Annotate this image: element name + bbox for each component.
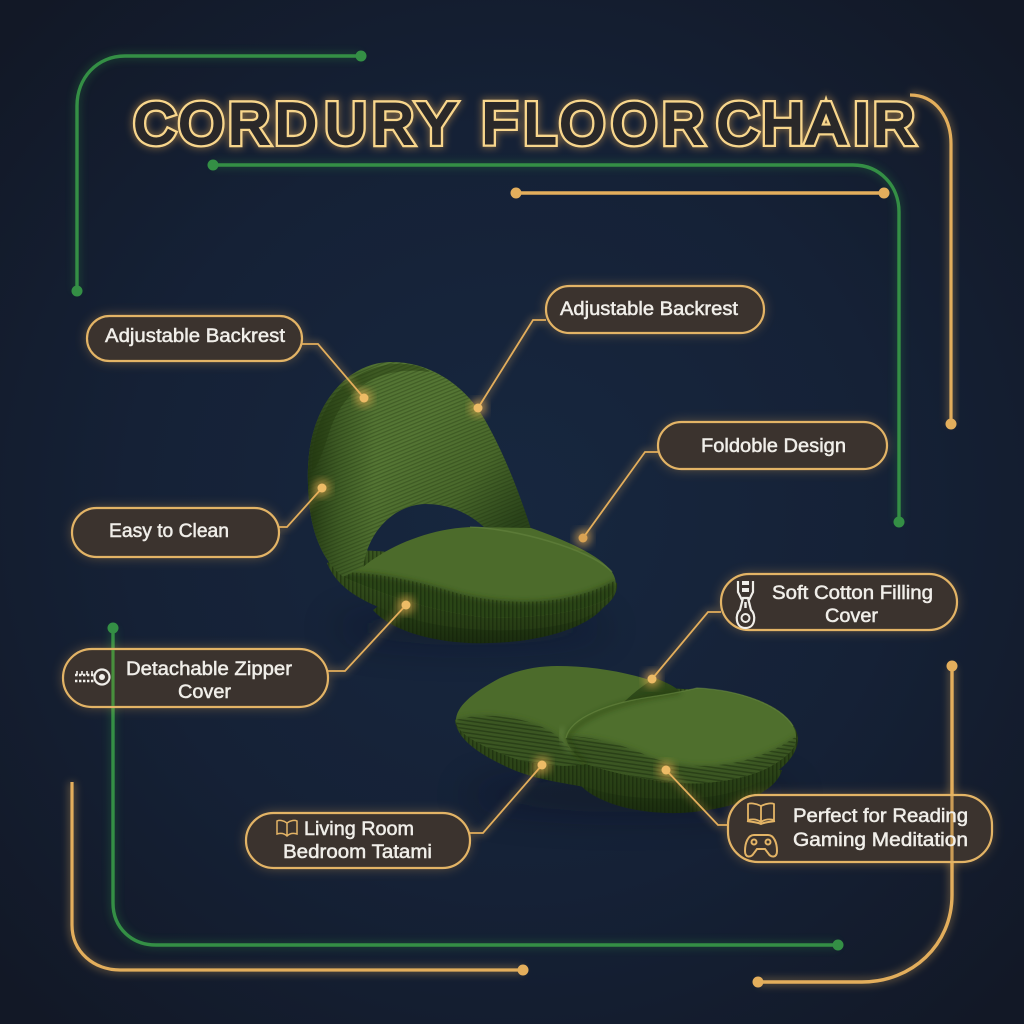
icon: game controller xyxy=(745,835,777,857)
title: CHAIR xyxy=(717,92,915,156)
connector: perfect for reading xyxy=(657,761,728,825)
circuit line: gold bottom right xyxy=(752,660,958,988)
connector: soft cotton xyxy=(643,612,721,688)
connector: easy to clean xyxy=(279,479,331,527)
title: FLOOR xyxy=(482,92,704,156)
title: CHAIR xyxy=(717,92,915,156)
label: soft cotton filling cover xyxy=(721,574,957,630)
chair: upright floor chair xyxy=(308,362,620,646)
label: adjustable backrest right: Adjustable Backrest xyxy=(560,299,739,320)
circuit line: green top left xyxy=(72,50,366,296)
label: soft cotton filling cover: Soft Cotton Filling xyxy=(772,583,933,604)
chair: folded flat cushion xyxy=(450,666,800,813)
icon: zipper pull xyxy=(737,581,754,628)
left lobe xyxy=(456,666,648,766)
circuit line: green bottom xyxy=(108,622,844,950)
connector: adjustable backrest left xyxy=(302,344,373,407)
title: CORDURY xyxy=(134,92,456,156)
title: FLOOR xyxy=(482,92,704,156)
label: living room bedroom tatami xyxy=(246,813,470,868)
label: adjustable backrest left: Adjustable Backrest xyxy=(105,326,286,347)
icon: zipper key xyxy=(75,670,110,684)
title: CORDURY xyxy=(134,92,456,156)
label: soft cotton filling cover: Cover xyxy=(825,606,879,627)
seat top and ribbed front xyxy=(344,526,616,618)
connector: living room xyxy=(470,756,551,833)
label: living room bedroom tatami: Bedroom Tatami xyxy=(283,842,432,863)
icon: open book xyxy=(747,803,775,824)
circuit line: green top right xyxy=(208,160,904,528)
connector: foldable design xyxy=(574,452,658,547)
circuit line: gold right top xyxy=(910,95,956,430)
title: CHAIR xyxy=(717,92,915,156)
label: perfect for reading gaming meditation: Gaming Meditation xyxy=(793,830,968,851)
circuit line: gold bottom left xyxy=(72,782,528,976)
circuit line: gold short top xyxy=(510,188,890,198)
label: adjustable backrest right xyxy=(546,286,764,333)
label: living room bedroom tatami: Living Room xyxy=(304,819,414,840)
title: FLOOR xyxy=(482,92,704,156)
label: foldable design xyxy=(658,422,887,469)
label: detachable zipper cover xyxy=(63,649,328,707)
title: CORDURY xyxy=(134,92,456,156)
label: perfect for reading gaming meditation xyxy=(728,795,992,862)
connector: adjustable backrest right xyxy=(469,320,546,417)
title xyxy=(134,92,915,156)
label: adjustable backrest left xyxy=(87,316,302,361)
label: foldable design: Foldoble Design xyxy=(701,436,846,457)
label: detachable zipper cover: Cover xyxy=(178,682,232,703)
label: easy to clean xyxy=(72,508,279,557)
icon: small open book xyxy=(277,820,297,836)
connector: detachable zipper xyxy=(328,596,415,671)
label: easy to clean: Easy to Clean xyxy=(109,521,229,542)
label: perfect for reading gaming meditation: Perfect for Reading xyxy=(793,806,968,827)
label: detachable zipper cover: Detachable Zipper xyxy=(126,659,293,680)
right lobe xyxy=(566,688,796,784)
